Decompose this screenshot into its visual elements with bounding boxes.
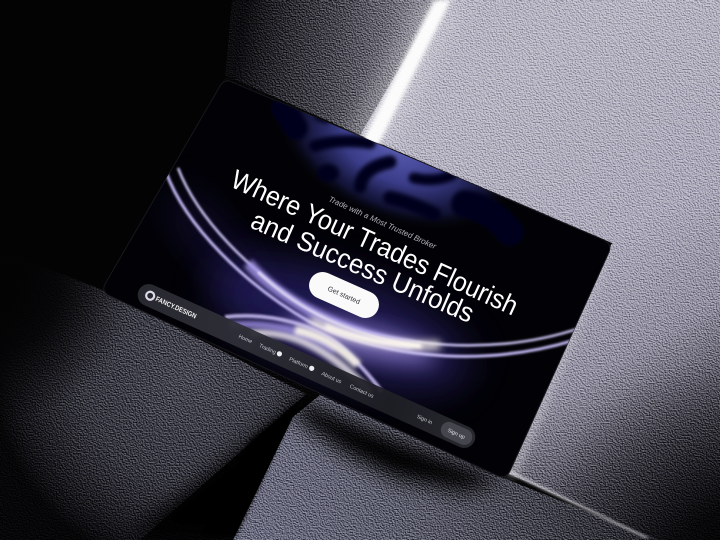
nav links: Home	[237, 334, 253, 345]
deep shadow, top left	[0, 0, 232, 290]
shadow under the screen	[296, 396, 505, 494]
soft fade of the left wall	[0, 160, 130, 420]
button: sign up	[438, 419, 475, 447]
nav links: Trading	[258, 343, 277, 356]
black band beside the block	[130, 394, 306, 536]
purple glow behind arcs	[156, 180, 483, 416]
sub-heading: Trade with a Most Trusted Broker	[327, 195, 438, 251]
screen body	[104, 81, 610, 477]
concrete floor block	[233, 395, 660, 540]
light arcs	[166, 168, 580, 392]
title: and Success Unfolds	[247, 205, 479, 329]
nav links	[237, 333, 433, 426]
logo	[145, 290, 198, 320]
logo: FANCY.DESIGN	[154, 296, 197, 320]
button: get started: Get started	[326, 286, 361, 306]
button: get started	[305, 268, 383, 322]
panel: tilted website screen	[103, 80, 610, 478]
nav links: Platform	[288, 357, 309, 370]
light line along wall base	[505, 250, 650, 538]
nav links: Contact us	[348, 384, 375, 400]
upper right lit wall	[360, 0, 720, 540]
blue blob pattern	[271, 100, 524, 246]
nav links: Sign in	[416, 414, 433, 426]
button: sign up: Sign up	[446, 428, 466, 441]
light streak	[342, 0, 464, 146]
navigation bar	[134, 281, 479, 451]
nav links: About us	[320, 371, 342, 385]
lower left dark wall	[0, 250, 306, 540]
upper wall left of the light streak	[225, 0, 445, 135]
title: Where Your Trades Flourish	[227, 164, 523, 321]
